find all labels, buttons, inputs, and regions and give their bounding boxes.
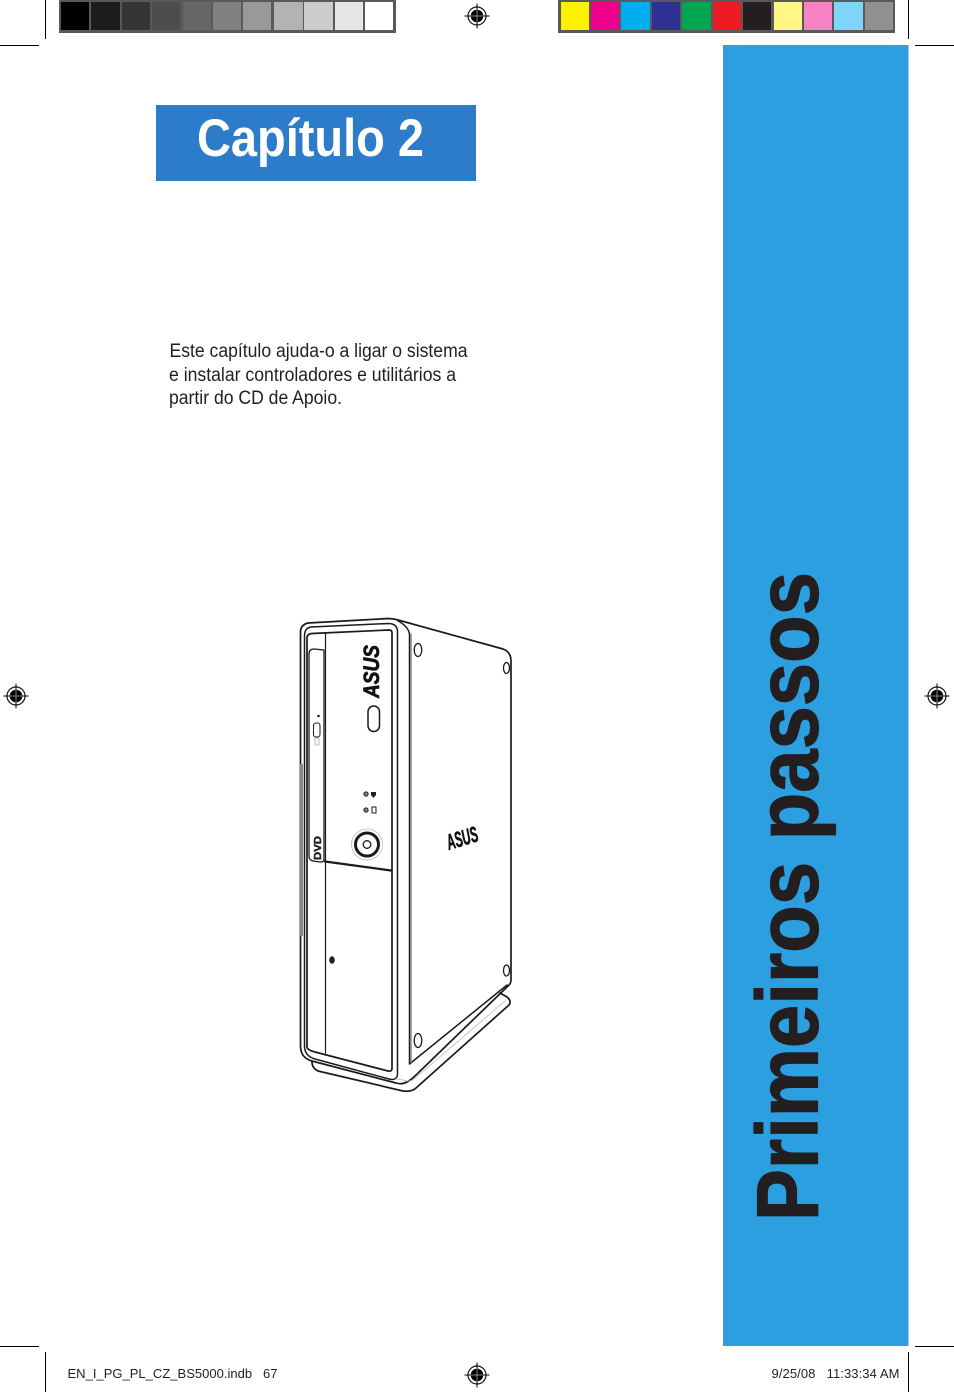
footer: file name: EN_I_PG_PL_CZ_BS5000.indb 67 [68,1366,278,1381]
chapter heading: Capítulo 2 [197,109,424,168]
illustration: desktop computer [300,618,511,1091]
drive eject button [314,715,320,745]
ASUS logo: front: ASUS [359,645,384,699]
status LEDs [364,792,376,813]
left grey band [300,765,303,935]
base foot [312,993,510,1091]
optical drive [309,649,324,862]
side panel: blue band [723,45,908,1346]
registration mark: top [464,4,490,28]
panel divider [324,633,326,1053]
registration mark: right [924,684,950,708]
process colour bar [558,0,895,33]
intro text: Este capítulo ajuda-o a ligar o sistema [170,341,468,362]
side panel edge [398,621,507,1064]
front button [368,706,380,732]
front panel [307,630,392,1071]
registration mark: bottom [464,1362,490,1388]
chapter heading [156,105,476,181]
vertical title: Primeiros passos [740,572,836,1221]
intro text: partir do CD de Apoio. [169,388,342,409]
DVD logo: DVD [312,836,324,860]
door latch [329,956,335,964]
intro text: e instalar controladores e utilitários a [169,365,456,386]
footer: date and time: 9/25/08 11:33:34 AM [772,1366,900,1381]
screws [414,644,510,1048]
computer outer outline [300,618,511,1084]
intro text [169,341,468,409]
ASUS logo: side: ASUS [443,821,481,855]
power button [352,829,382,860]
greyscale colour bar [59,0,396,33]
registration mark: left [4,684,28,708]
front bezel [304,624,398,1079]
